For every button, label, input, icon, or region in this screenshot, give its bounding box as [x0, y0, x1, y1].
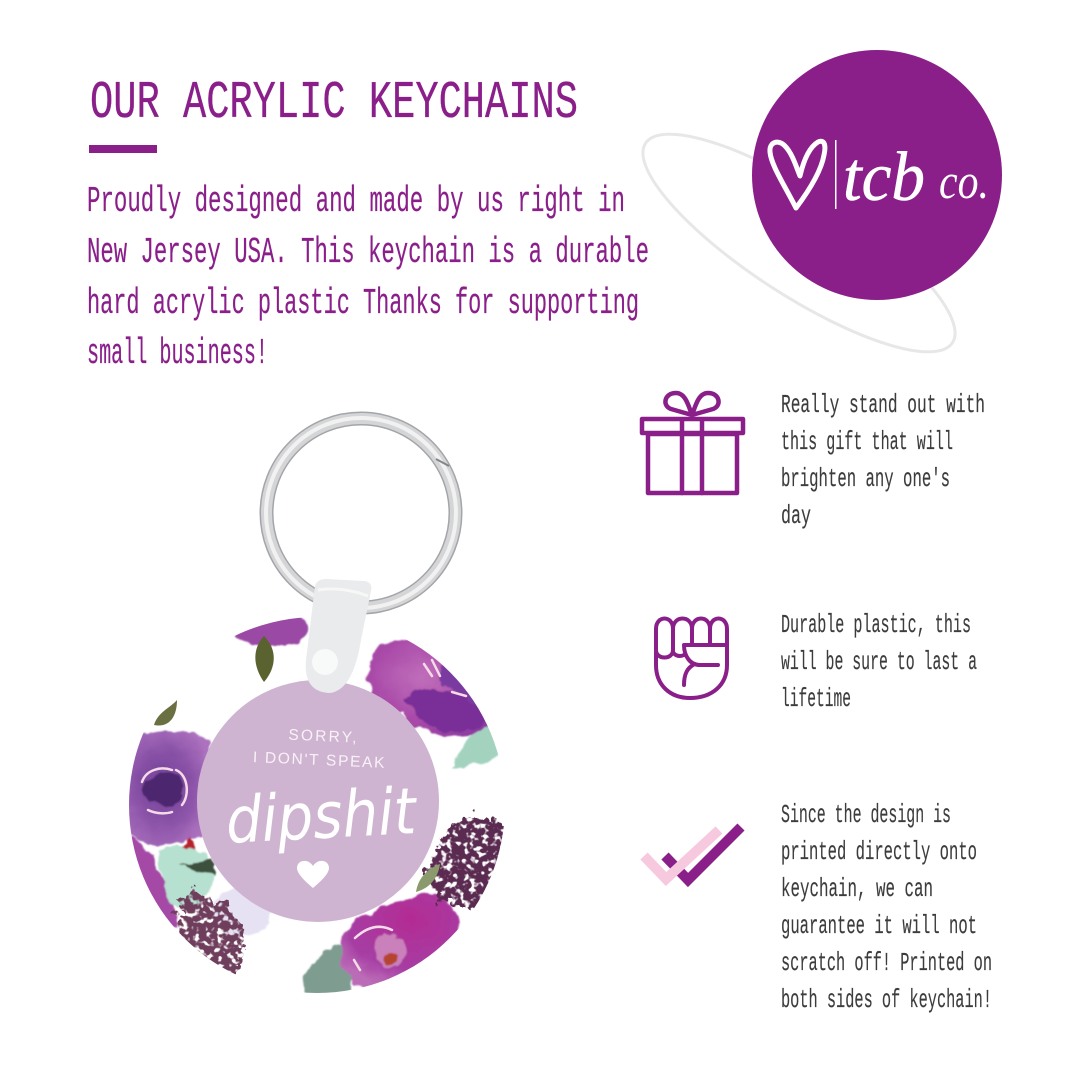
logo heart [770, 141, 825, 208]
gift benefit text: this gift that will [781, 427, 953, 457]
icon: gift box [642, 393, 743, 493]
gift benefit text: brighten any one's [781, 464, 950, 494]
intro paragraph [87, 181, 649, 374]
logo badge [752, 50, 1002, 300]
gift benefit text: day [781, 501, 811, 531]
round acrylic tag [122, 611, 515, 1000]
title underline [89, 145, 157, 153]
keychain product [122, 418, 515, 1000]
durability benefit text: lifetime [781, 684, 851, 714]
petal highlights [142, 660, 466, 978]
metal split ring [266, 418, 456, 608]
lilac speckle clusters [176, 815, 515, 985]
icon: double check marks [644, 827, 741, 880]
logo divider [835, 140, 836, 209]
print quality benefit text [781, 800, 992, 1015]
lilac label circle [197, 680, 439, 922]
logo wordmark [843, 139, 989, 216]
label heart [297, 861, 329, 888]
label text: SORRY, [288, 727, 359, 747]
logo wordmark: tcb [843, 139, 925, 216]
intro paragraph: Proudly designed and made by us right in [87, 181, 625, 222]
logo wordmark: co. [939, 153, 989, 209]
print quality benefit text: Since the design is [781, 800, 951, 830]
olive leaves [255, 636, 274, 682]
intro paragraph: New Jersey USA. This keychain is a durable [87, 232, 649, 273]
floral pattern [122, 611, 515, 1000]
intro paragraph: small business! [87, 333, 268, 374]
plastic strap clip [306, 579, 371, 693]
title: OUR ACRYLIC KEYCHAINS [90, 73, 578, 133]
print quality benefit text: keychain, we can [781, 874, 933, 904]
icon: raised fist [656, 618, 727, 698]
gift benefit text [781, 390, 985, 531]
durability benefit text [781, 610, 977, 714]
label text: I DON'T SPEAK [253, 749, 387, 772]
label script word: dipshit [224, 775, 420, 859]
decorative logo orbit ellipse [617, 100, 981, 386]
intro paragraph: hard acrylic plastic Thanks for supporting [87, 283, 639, 324]
label text [253, 725, 388, 772]
